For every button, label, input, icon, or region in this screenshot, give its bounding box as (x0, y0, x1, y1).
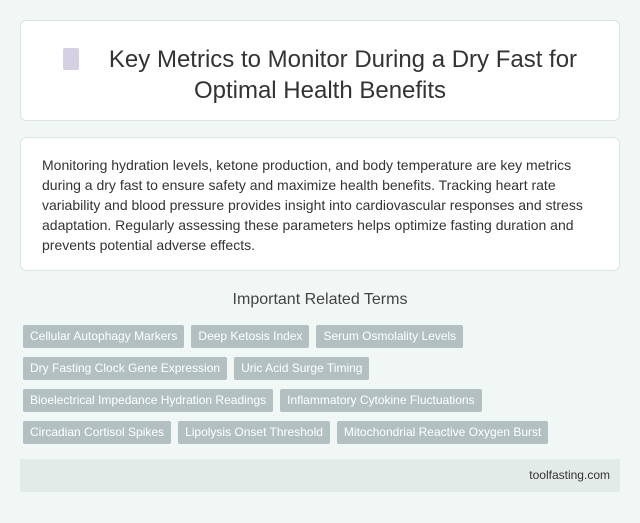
tags: Cellular Autophagy Markers (30, 329, 177, 343)
tags: Mitochondrial Reactive Oxygen Burst (344, 425, 541, 439)
tags: Uric Acid Surge Timing (241, 361, 362, 375)
tags: Deep Ketosis Index (198, 329, 302, 343)
summary text (20, 137, 620, 271)
title card (20, 20, 620, 121)
footer (20, 459, 620, 492)
tags: Lipolysis Onset Threshold (185, 425, 323, 439)
tags: Bioelectrical Impedance Hydration Readings (30, 393, 266, 407)
summary text: Monitoring hydration levels, ketone production, and body temperature are key metrics during a dry fast to ensure safety and maximize health benefits. Tracking heart rate variability and blood pressure provides insight into cardiovascular responses and stress adaptation. Regularly assessing these parameters helps optimize fasting duration and prevents potential adverse effects. (42, 157, 583, 253)
heading: Optimal Health Benefits (194, 77, 446, 104)
tags (23, 325, 548, 444)
related terms heading: Important Related Terms (233, 291, 407, 308)
tags: Inflammatory Cytokine Fluctuations (287, 393, 475, 407)
tags: Circadian Cortisol Spikes (30, 425, 164, 439)
heading: Key Metrics to Monitor During a Dry Fast for (109, 46, 577, 73)
heading (63, 46, 577, 104)
footer: toolfasting.com (529, 468, 610, 482)
tags: Serum Osmolality Levels (323, 329, 456, 343)
tags: Dry Fasting Clock Gene Expression (30, 361, 220, 375)
